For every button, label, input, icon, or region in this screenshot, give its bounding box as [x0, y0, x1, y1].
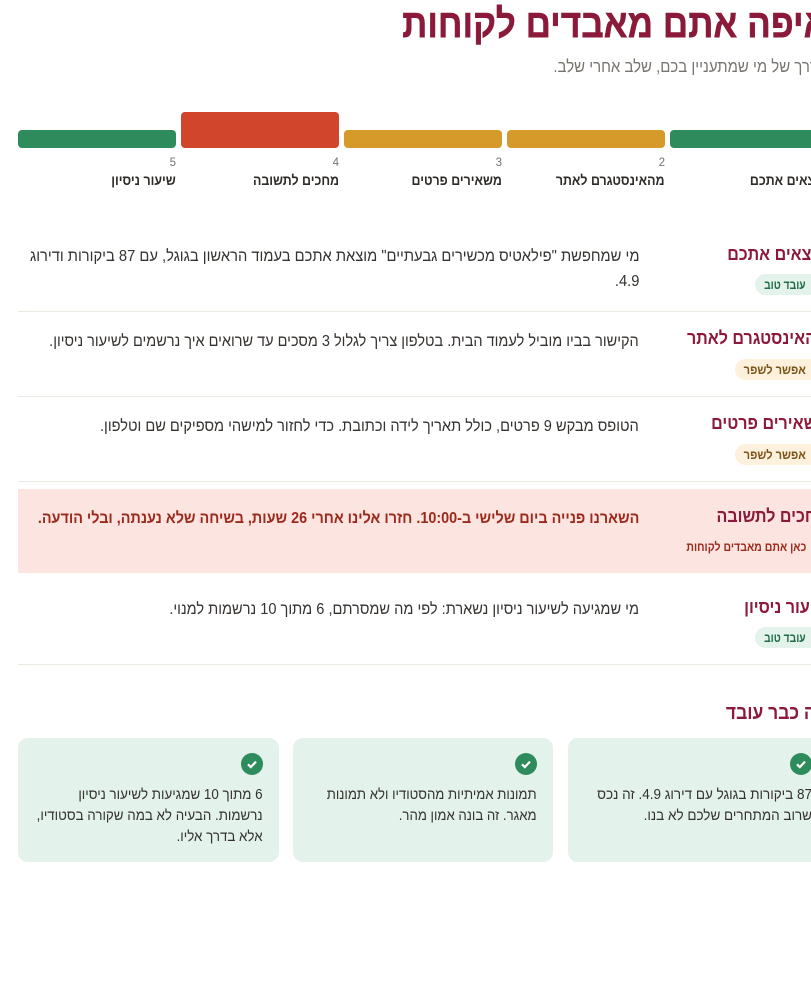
badge text: אפשר לשפר [744, 448, 806, 462]
card text [37, 787, 263, 845]
row 1 description: 4.9. [614, 273, 639, 290]
step 5 number: 5 [170, 157, 176, 169]
row 1 description [30, 248, 639, 290]
row 1 badge [755, 274, 811, 295]
row 4 description: השארנו פנייה ביום שלישי ב-10:00. חזרו אלינו אחרי 26 שעות, בשיחה שלא נענתה, ובלי הודעה. [38, 510, 639, 527]
row 4 warning tag: כאן אתם מאבדים לקוחות [686, 540, 806, 554]
row 2 description: הקישור בביו מוביל לעמוד הבית. בטלפון צריך לגלול 3 מסכים עד שרואים איך נרשמים לשיעור ניסיון. [49, 333, 639, 350]
funnel step 2 bar [507, 130, 665, 148]
row 1 description: מי שמחפשת "פילאטיס מכשירים גבעתיים" מוצאת אתכם בעמוד הראשון בגוגל, עם 87 ביקורות ודירוג [30, 248, 639, 265]
step 4 number: 4 [333, 157, 339, 169]
card text: 6 מתוך 10 שמגיעות לשיעור ניסיון [79, 787, 263, 803]
step 3 label: משאירים פרטים [412, 172, 502, 188]
row 5 badge [755, 627, 811, 648]
card text: נרשמות. הבעיה לא במה שקורה בסטודיו, [37, 808, 263, 824]
step 3 number: 3 [496, 157, 502, 169]
card text: מאגר. זה בונה אמון מהר. [399, 808, 537, 824]
row 5 description: מי שמגיעה לשיעור ניסיון נשארת: לפי מה שמסרתם, 6 מתוך 10 נרשמות למנוי. [169, 601, 639, 618]
badge text: עובד טוב [764, 278, 806, 292]
step 5 label: שיעור ניסיון [111, 172, 176, 188]
badge text: עובד טוב [764, 631, 806, 645]
funnel step 4 bar highlighted [181, 112, 339, 148]
row 3 badge [735, 444, 811, 465]
badge text: אפשר לשפר [744, 363, 806, 377]
card: real photos [293, 738, 553, 862]
row 2 badge [735, 359, 811, 380]
step 2 label: מהאינסטגרם לאתר [556, 172, 665, 188]
card: reviews [568, 738, 811, 862]
row 4 highlighted panel [18, 489, 811, 573]
card text: 87 ביקורות בגוגל עם דירוג 4.9. זה נכס [597, 787, 811, 803]
row 3 description: הטופס מבקש 9 פרטים, כולל תאריך לידה וכתובת. כדי לחזור למישהי מספיקים שם וטלפון. [100, 418, 639, 435]
icon: check [790, 753, 811, 775]
step 4 label: מחכים לתשובה [253, 172, 339, 188]
card text: אלא בדרך אליו. [177, 829, 263, 845]
funnel step 5 bar [18, 130, 176, 148]
card text [597, 787, 811, 824]
step 2 number: 2 [659, 157, 665, 169]
card: trial retention [18, 738, 279, 862]
icon: check [241, 753, 263, 775]
funnel step 1 bar [670, 130, 811, 148]
card text: שרוב המתחרים שלכם לא בנו. [644, 808, 811, 824]
funnel step 3 bar [344, 130, 502, 148]
card text [327, 787, 537, 824]
icon: check [515, 753, 537, 775]
card text: תמונות אמיתיות מהסטודיו ולא תמונות [327, 787, 537, 803]
